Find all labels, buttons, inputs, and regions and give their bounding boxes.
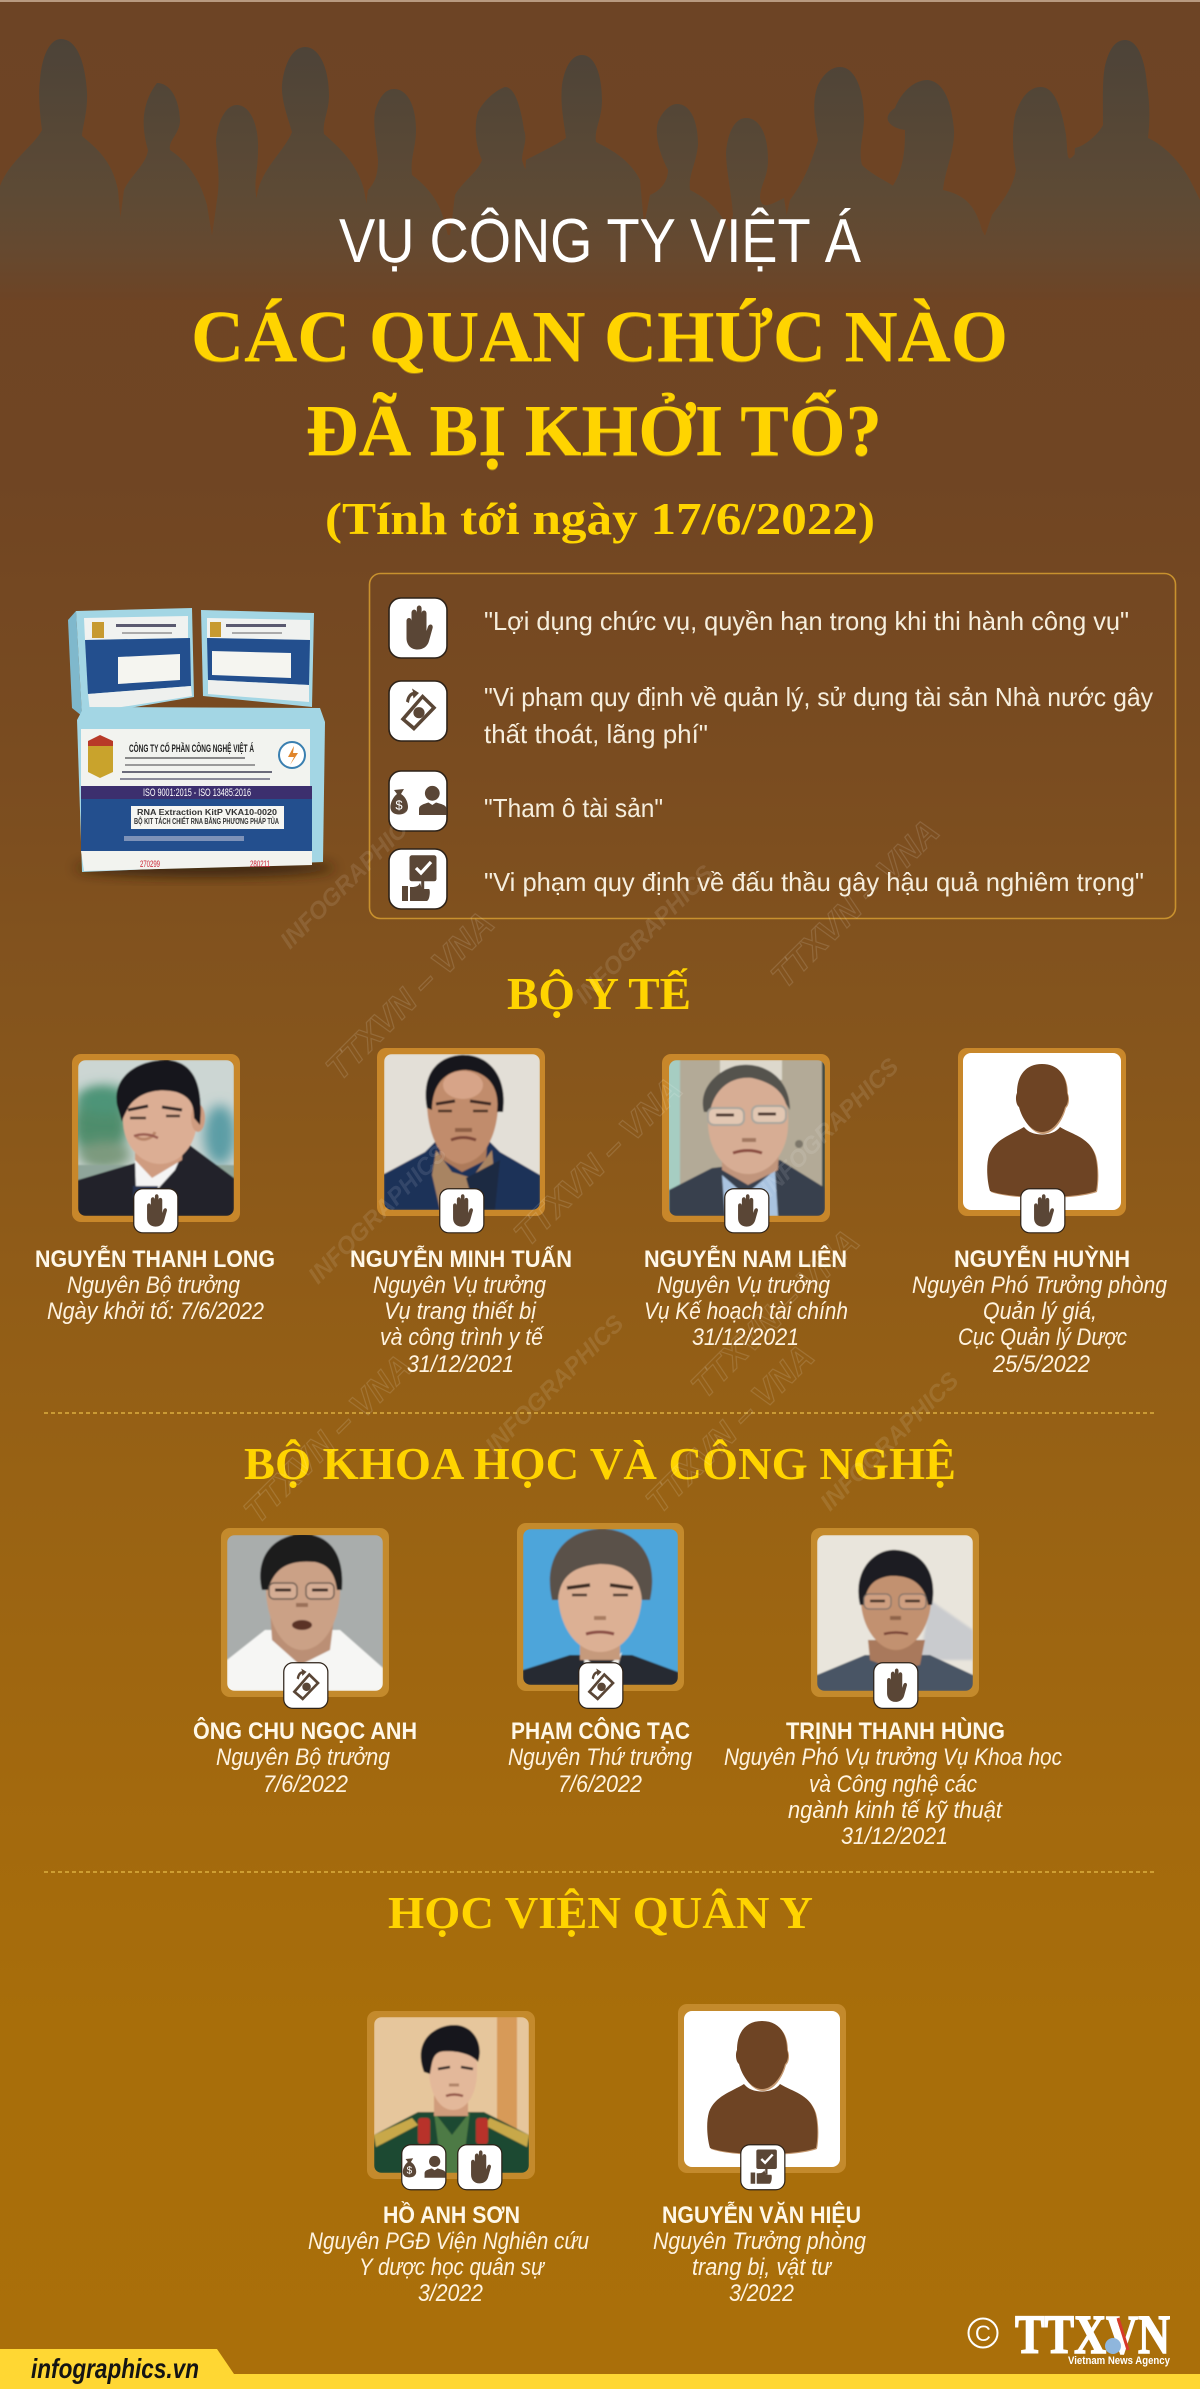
legend text: state assets: thất thoát, lãng phí" xyxy=(484,719,708,749)
photo xyxy=(817,1535,973,1691)
small box right xyxy=(201,610,314,707)
watermarks: TTXVN – VNA xyxy=(764,812,947,996)
photo xyxy=(384,1054,540,1210)
heading: Bộ Y tế: BỘ Y TẾ xyxy=(507,967,691,1019)
photo xyxy=(72,1060,236,1216)
name: NGUYỄN HUỲNH xyxy=(954,1244,1130,1273)
watermarks: INFOGRAPHICS xyxy=(570,860,719,1009)
title line 1: VỤ CÔNG TY VIỆT Á xyxy=(339,207,862,276)
date note: (Tính tới ngày 17/6/2022) xyxy=(325,493,875,544)
legend text: abuse of power: "Lợi dụng chức vụ, quyền hạn trong khi thi hành công vụ" xyxy=(484,606,1129,636)
role: 25/5/2022 xyxy=(992,1351,1090,1378)
logo shield xyxy=(88,744,113,778)
product boxes image xyxy=(68,608,335,877)
watermarks: TTXVN – VNA xyxy=(319,904,502,1088)
badge: hand xyxy=(725,1189,769,1233)
watermarks: TTXVN – VNA xyxy=(507,1070,690,1254)
role: Nguyên PGĐ Viện Nghiên cứu xyxy=(308,2228,589,2255)
role xyxy=(912,1272,1168,1378)
name: NGUYỄN NAM LIÊN xyxy=(644,1244,847,1273)
card: Nguyễn Huỳnh xyxy=(912,1048,1168,1378)
large box: RNA Extraction KitP VKA10-0020 xyxy=(137,808,278,817)
role: Nguyên Bộ trưởng xyxy=(216,1744,391,1771)
watermarks: TTXVN – VNA xyxy=(639,1337,822,1521)
watermarks: INFOGRAPHICS xyxy=(303,1140,452,1289)
photo xyxy=(523,1529,678,1685)
watermarks: TTXVN – VNA xyxy=(684,1222,867,1406)
role xyxy=(216,1744,391,1798)
badge: money bag and person xyxy=(402,2145,446,2190)
card: Nguyễn Thanh Long xyxy=(35,1054,275,1325)
name: HỒ ANH SƠN xyxy=(383,2201,520,2229)
site url: infographics.vn xyxy=(31,2353,199,2384)
badge: vote xyxy=(741,2145,785,2190)
role xyxy=(508,1744,693,1798)
role xyxy=(47,1272,264,1325)
name: PHẠM CÔNG TẠC xyxy=(511,1717,690,1745)
role: 3/2022 xyxy=(418,2280,483,2307)
heading: Học viện Quân y: HỌC VIỆN QUÂN Y xyxy=(388,1887,813,1938)
icon: vote xyxy=(389,849,447,909)
footer bar xyxy=(0,2349,1200,2389)
card: Nguyễn Nam Liên xyxy=(644,1054,848,1351)
role: Nguyên Trưởng phòng xyxy=(653,2228,867,2255)
logo: TTXVN xyxy=(968,2304,1171,2367)
role: 31/12/2021 xyxy=(841,1823,948,1850)
large box: 270299 xyxy=(140,859,160,869)
agency tagline: Vietnam News Agency xyxy=(1068,2355,1171,2367)
badge: hand xyxy=(874,1663,918,1708)
role: 3/2022 xyxy=(729,2280,794,2307)
role: 31/12/2021 xyxy=(407,1351,514,1378)
badge: banknote xyxy=(284,1663,328,1708)
card: Phạm Công Tạc xyxy=(508,1523,693,1798)
role: Vụ Kế hoạch tài chính xyxy=(644,1298,848,1325)
watermarks: INFOGRAPHICS xyxy=(275,805,424,954)
copyright mark: C xyxy=(975,2321,991,2346)
role: và công trình y tế xyxy=(380,1324,544,1351)
badge: hand xyxy=(440,1189,484,1233)
role: Y dược học quân sự xyxy=(359,2254,546,2281)
legend text: embezzlement: "Tham ô tài sản" xyxy=(484,793,663,823)
role: trang bị, vật tư xyxy=(692,2254,833,2281)
role: và Công nghệ các xyxy=(809,1771,977,1798)
badge: hand xyxy=(458,2145,502,2190)
role: Ngày khởi tố: 7/6/2022 xyxy=(47,1298,264,1325)
card: Trịnh Thanh Hùng xyxy=(724,1528,1062,1850)
photo xyxy=(668,1060,825,1216)
role: 7/6/2022 xyxy=(558,1771,642,1798)
copyright mark xyxy=(968,2318,998,2348)
role: Cục Quản lý Dược xyxy=(958,1324,1127,1351)
panel: violations legend xyxy=(370,574,1176,918)
legend text: state assets: "Vi phạm quy định về quản lý, sử dụng tài sản Nhà nước gây xyxy=(484,682,1153,712)
name: NGUYỄN MINH TUẤN xyxy=(350,1244,572,1273)
badge: banknote xyxy=(579,1663,623,1708)
watermarks: INFOGRAPHICS xyxy=(480,1310,629,1459)
role: 7/6/2022 xyxy=(263,1771,348,1798)
photo xyxy=(374,2017,529,2173)
role xyxy=(724,1744,1062,1850)
silhouettes of people xyxy=(0,39,1200,300)
icon: money bag and person xyxy=(389,771,447,831)
card: Hồ Anh Sơn xyxy=(308,2011,589,2307)
icon: banknote xyxy=(389,681,447,741)
heading: Bộ Khoa học và Công nghệ: BỘ KHOA HỌC VÀ CÔNG NGHỆ xyxy=(244,1438,956,1489)
badge: hand xyxy=(134,1189,178,1233)
role xyxy=(644,1272,848,1351)
small box left xyxy=(68,608,194,716)
role: 31/12/2021 xyxy=(692,1324,799,1351)
icon: hand xyxy=(389,598,447,658)
watermarks xyxy=(237,805,964,1531)
card: Nguyễn Minh Tuấn xyxy=(350,1048,572,1378)
role xyxy=(308,2228,589,2307)
role: Nguyên Vụ trưởng xyxy=(657,1272,831,1299)
name: NGUYỄN VĂN HIỆU xyxy=(662,2200,861,2229)
legend text: bidding: "Vi phạm quy định về đấu thầu gây hậu quả nghiêm trọng" xyxy=(484,867,1144,897)
title line 3: ĐÃ BỊ KHỞI TỐ? xyxy=(306,388,882,471)
role xyxy=(653,2228,867,2307)
placeholder silhouette xyxy=(707,2021,818,2155)
role: Nguyên Phó Vụ trưởng Vụ Khoa học xyxy=(724,1744,1062,1771)
role: Vụ trang thiết bị xyxy=(384,1298,537,1325)
large box: ISO 9001:2015 - ISO 13485:2016 xyxy=(143,787,251,799)
watermarks: INFOGRAPHICS xyxy=(815,1367,964,1516)
placeholder silhouette xyxy=(987,1064,1098,1198)
badge: hand xyxy=(1021,1189,1065,1233)
role: Quản lý giá, xyxy=(983,1298,1097,1325)
photo xyxy=(227,1534,383,1691)
watermarks: TTXVN – VNA xyxy=(237,1347,420,1531)
role: Nguyên Thứ trưởng xyxy=(508,1744,693,1771)
large box xyxy=(77,707,325,872)
large box: BỘ KIT TÁCH CHIẾT RNA BẰNG PHƯƠNG PHÁP TỦA xyxy=(134,816,279,826)
title line 2: CÁC QUAN CHỨC NÀO xyxy=(191,296,1008,377)
role: Nguyên Bộ trưởng xyxy=(67,1272,241,1299)
name: NGUYỄN THANH LONG xyxy=(35,1244,275,1273)
name: TRỊNH THANH HÙNG xyxy=(786,1717,1005,1745)
role: Nguyên Phó Trưởng phòng xyxy=(912,1272,1168,1299)
title xyxy=(191,207,1008,544)
role: ngành kinh tế kỹ thuật xyxy=(788,1797,1003,1824)
role: Nguyên Vụ trưởng xyxy=(373,1272,547,1299)
card: Chu Ngọc Anh xyxy=(193,1528,417,1798)
watermarks: INFOGRAPHICS xyxy=(755,1053,904,1202)
legend text: state assets xyxy=(484,682,1153,749)
role xyxy=(373,1272,547,1378)
box text: CÔNG TY CỔ PHẦN CÔNG NGHỆ VIỆT Á xyxy=(129,742,254,755)
name: ÔNG CHU NGỌC ANH xyxy=(193,1717,417,1745)
card: Nguyễn Văn Hiệu xyxy=(653,2004,867,2307)
large box: 280211 xyxy=(250,859,270,869)
